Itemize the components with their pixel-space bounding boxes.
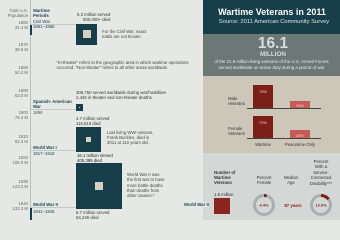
war: Civil War: 1861–1865 xyxy=(33,24,55,29)
population 1880 xyxy=(15,65,28,75)
World War II square xyxy=(76,163,122,209)
population 1890: 1890 xyxy=(18,88,28,93)
World War II note: than deaths from xyxy=(127,188,159,193)
median age heading: Age xyxy=(287,180,295,185)
war: Civil War: Civil War xyxy=(33,19,50,24)
female peacetime bar: 28% xyxy=(296,133,304,138)
World War I stats: 116,516 died xyxy=(76,121,101,126)
note: Civil War: For the Civil War, exact xyxy=(102,29,146,34)
peacetime label: Peacetime Only xyxy=(285,142,315,147)
World War II note xyxy=(127,172,164,198)
Korean War stats: 54,246 died xyxy=(76,215,98,220)
female peacetime bar xyxy=(290,130,310,138)
population 1920: 106.0 M xyxy=(12,160,28,165)
population 1870: 1870 xyxy=(18,42,28,47)
description: served worldwide on active duty during a period of war xyxy=(219,65,324,70)
population 1920 xyxy=(12,155,28,165)
disability heading: Connected xyxy=(311,175,331,180)
demographics panel xyxy=(203,153,340,220)
periods heading: Wartime xyxy=(33,8,50,12)
war: Civil War xyxy=(30,12,110,45)
axis heading: Total U.S. xyxy=(9,8,28,12)
in-theater note xyxy=(56,60,189,70)
Spanish-American stats: 306,760 served worldwide during war/hostilities xyxy=(76,90,166,95)
periods heading xyxy=(33,8,50,18)
million: MILLION xyxy=(260,50,286,58)
periods heading: Periods xyxy=(33,13,49,18)
World War I connector xyxy=(31,150,76,151)
female baseline xyxy=(247,138,321,139)
population 1860: 1860 xyxy=(18,20,28,25)
World War I note: 2011 at 110 years old. xyxy=(107,140,149,145)
note: Civil War xyxy=(102,29,146,39)
population 1920: 1920 xyxy=(18,155,28,160)
description: of the 21.6 million living veterans of the U.S. Armed Forces xyxy=(214,59,329,64)
female label: Female xyxy=(228,126,242,130)
disability heading: Percent xyxy=(314,159,328,164)
female label xyxy=(228,126,245,136)
World War I label: World War I xyxy=(33,144,57,150)
source: Source: 2011 American Community Survey xyxy=(219,19,329,25)
World War II tab: World War II xyxy=(184,202,209,206)
percent female heading: Percent xyxy=(257,175,271,180)
World War II stats: 16.1 million served xyxy=(77,152,113,158)
World War I note: Last living WWI veteran, xyxy=(107,130,153,134)
population 1940: 1940 xyxy=(18,201,28,206)
population 1860: 31.4 M xyxy=(15,25,28,30)
in-theater note: occurred. "Non-theater" refers to all other areas worldwide. xyxy=(56,65,168,70)
population 1860 xyxy=(15,20,28,30)
bar chart panel xyxy=(203,76,340,153)
World War II stats: 405,399 died xyxy=(77,158,102,163)
axis heading: Population xyxy=(8,13,28,18)
World War II dates: 1941–1945 xyxy=(33,208,55,214)
female wartime bar: 72% xyxy=(259,120,267,125)
disability heading: With a xyxy=(315,164,327,169)
number heading: Number of xyxy=(214,170,236,174)
key figure panel xyxy=(203,34,340,76)
male label: Male xyxy=(228,96,237,100)
population 1890: 63.0 M xyxy=(15,93,28,98)
population 1910 xyxy=(15,134,28,144)
male baseline xyxy=(247,108,321,109)
donut: percent female: 4.4% xyxy=(259,202,269,208)
disability heading xyxy=(310,159,332,186)
number heading: Veterans xyxy=(214,180,232,185)
population 1870 xyxy=(15,42,28,52)
donut: service-connected disability: 13.0% xyxy=(315,202,327,208)
war: Spanish-American War: 1898 xyxy=(33,110,43,114)
donut: service-connected disability xyxy=(310,194,332,216)
World War II note: the first war to have xyxy=(127,177,164,182)
male label xyxy=(228,96,245,106)
header panel xyxy=(203,0,340,34)
median age value: 87 years xyxy=(284,202,302,208)
description xyxy=(214,59,329,70)
war: Civil War: 500,000+ died xyxy=(83,17,110,22)
big number: 16.1 xyxy=(258,35,288,52)
axis heading xyxy=(8,8,28,18)
note: Civil War: totals are not known. xyxy=(102,34,142,39)
male wartime bar: 75% xyxy=(259,89,267,94)
population 1940: 132.2 M xyxy=(12,206,28,211)
timeline panel xyxy=(8,0,189,220)
wartime label: Wartime xyxy=(255,142,271,147)
World War I note xyxy=(107,130,153,145)
population 1870: 38.6 M xyxy=(15,47,28,52)
population 1930: 123.2 M xyxy=(12,184,28,189)
timeline connector xyxy=(31,207,76,208)
disability heading: Disability*** xyxy=(310,181,332,186)
war: Civil War: 5.3 million served xyxy=(77,12,110,17)
male peacetime bar xyxy=(290,101,310,108)
Spanish-American stats: 2,446 in-theater and non-theater deaths xyxy=(76,95,152,100)
population 1900: 76.2 M xyxy=(15,115,28,120)
percent female heading: Female xyxy=(257,180,271,185)
population 1900 xyxy=(15,110,28,120)
in-theater note: "In-theater" refers to the geographic area in which wartime operations xyxy=(56,60,189,64)
World War II stats xyxy=(77,152,113,163)
World War II note: other causes.* xyxy=(127,193,154,198)
World War II note: more battle deaths xyxy=(127,183,163,188)
wwii count: 1.8 million xyxy=(214,192,233,197)
percent female heading xyxy=(256,175,272,185)
World War II timeline label: World War II xyxy=(33,202,58,206)
title: Wartime Veterans in 2011 xyxy=(218,7,326,17)
count bar xyxy=(214,198,230,214)
war: Spanish-American War: Spanish- American xyxy=(33,99,72,104)
Korean War stats xyxy=(76,210,110,220)
male label: Veterans xyxy=(228,101,245,106)
population 1900: 1900 xyxy=(18,110,28,115)
population 1910: 92.2 M xyxy=(15,139,28,144)
World War I stats: 4.7 million served xyxy=(76,116,109,120)
population 1910: 1910 xyxy=(18,134,28,139)
population 1880: 1880 xyxy=(18,65,28,70)
number heading xyxy=(214,170,236,185)
World War II note: World War II was xyxy=(127,172,159,177)
male wartime bar xyxy=(253,85,273,108)
population 1890 xyxy=(15,88,28,98)
male peacetime bar: 25% xyxy=(296,103,304,108)
World War I dates: 1917–1918 xyxy=(33,150,55,156)
World War II marker xyxy=(30,208,32,220)
donut: percent female xyxy=(253,194,275,216)
disability heading: Service- xyxy=(313,170,329,175)
median age heading: Median xyxy=(284,175,298,180)
war: Spanish-American War: War xyxy=(33,104,41,109)
World War II inner square xyxy=(95,182,103,190)
World War I note: Frank Buckles, died in xyxy=(107,135,149,140)
number heading: Wartime xyxy=(214,175,231,180)
population 1880: 50.2 M xyxy=(15,70,28,75)
war: Spanish-American War xyxy=(31,99,83,114)
World War I inner square xyxy=(86,137,91,142)
female label: Veterans xyxy=(228,131,245,136)
median age heading xyxy=(284,175,298,185)
population 1930 xyxy=(12,179,28,189)
female wartime bar xyxy=(253,116,273,138)
World War I square xyxy=(76,127,101,152)
Korean War stats: 5.7 million served xyxy=(76,210,109,214)
Spanish-American stats xyxy=(76,90,166,100)
population 1940 xyxy=(12,201,28,211)
population 1930: 1930 xyxy=(18,179,28,184)
axis line xyxy=(30,0,31,220)
World War I stats xyxy=(76,116,110,126)
